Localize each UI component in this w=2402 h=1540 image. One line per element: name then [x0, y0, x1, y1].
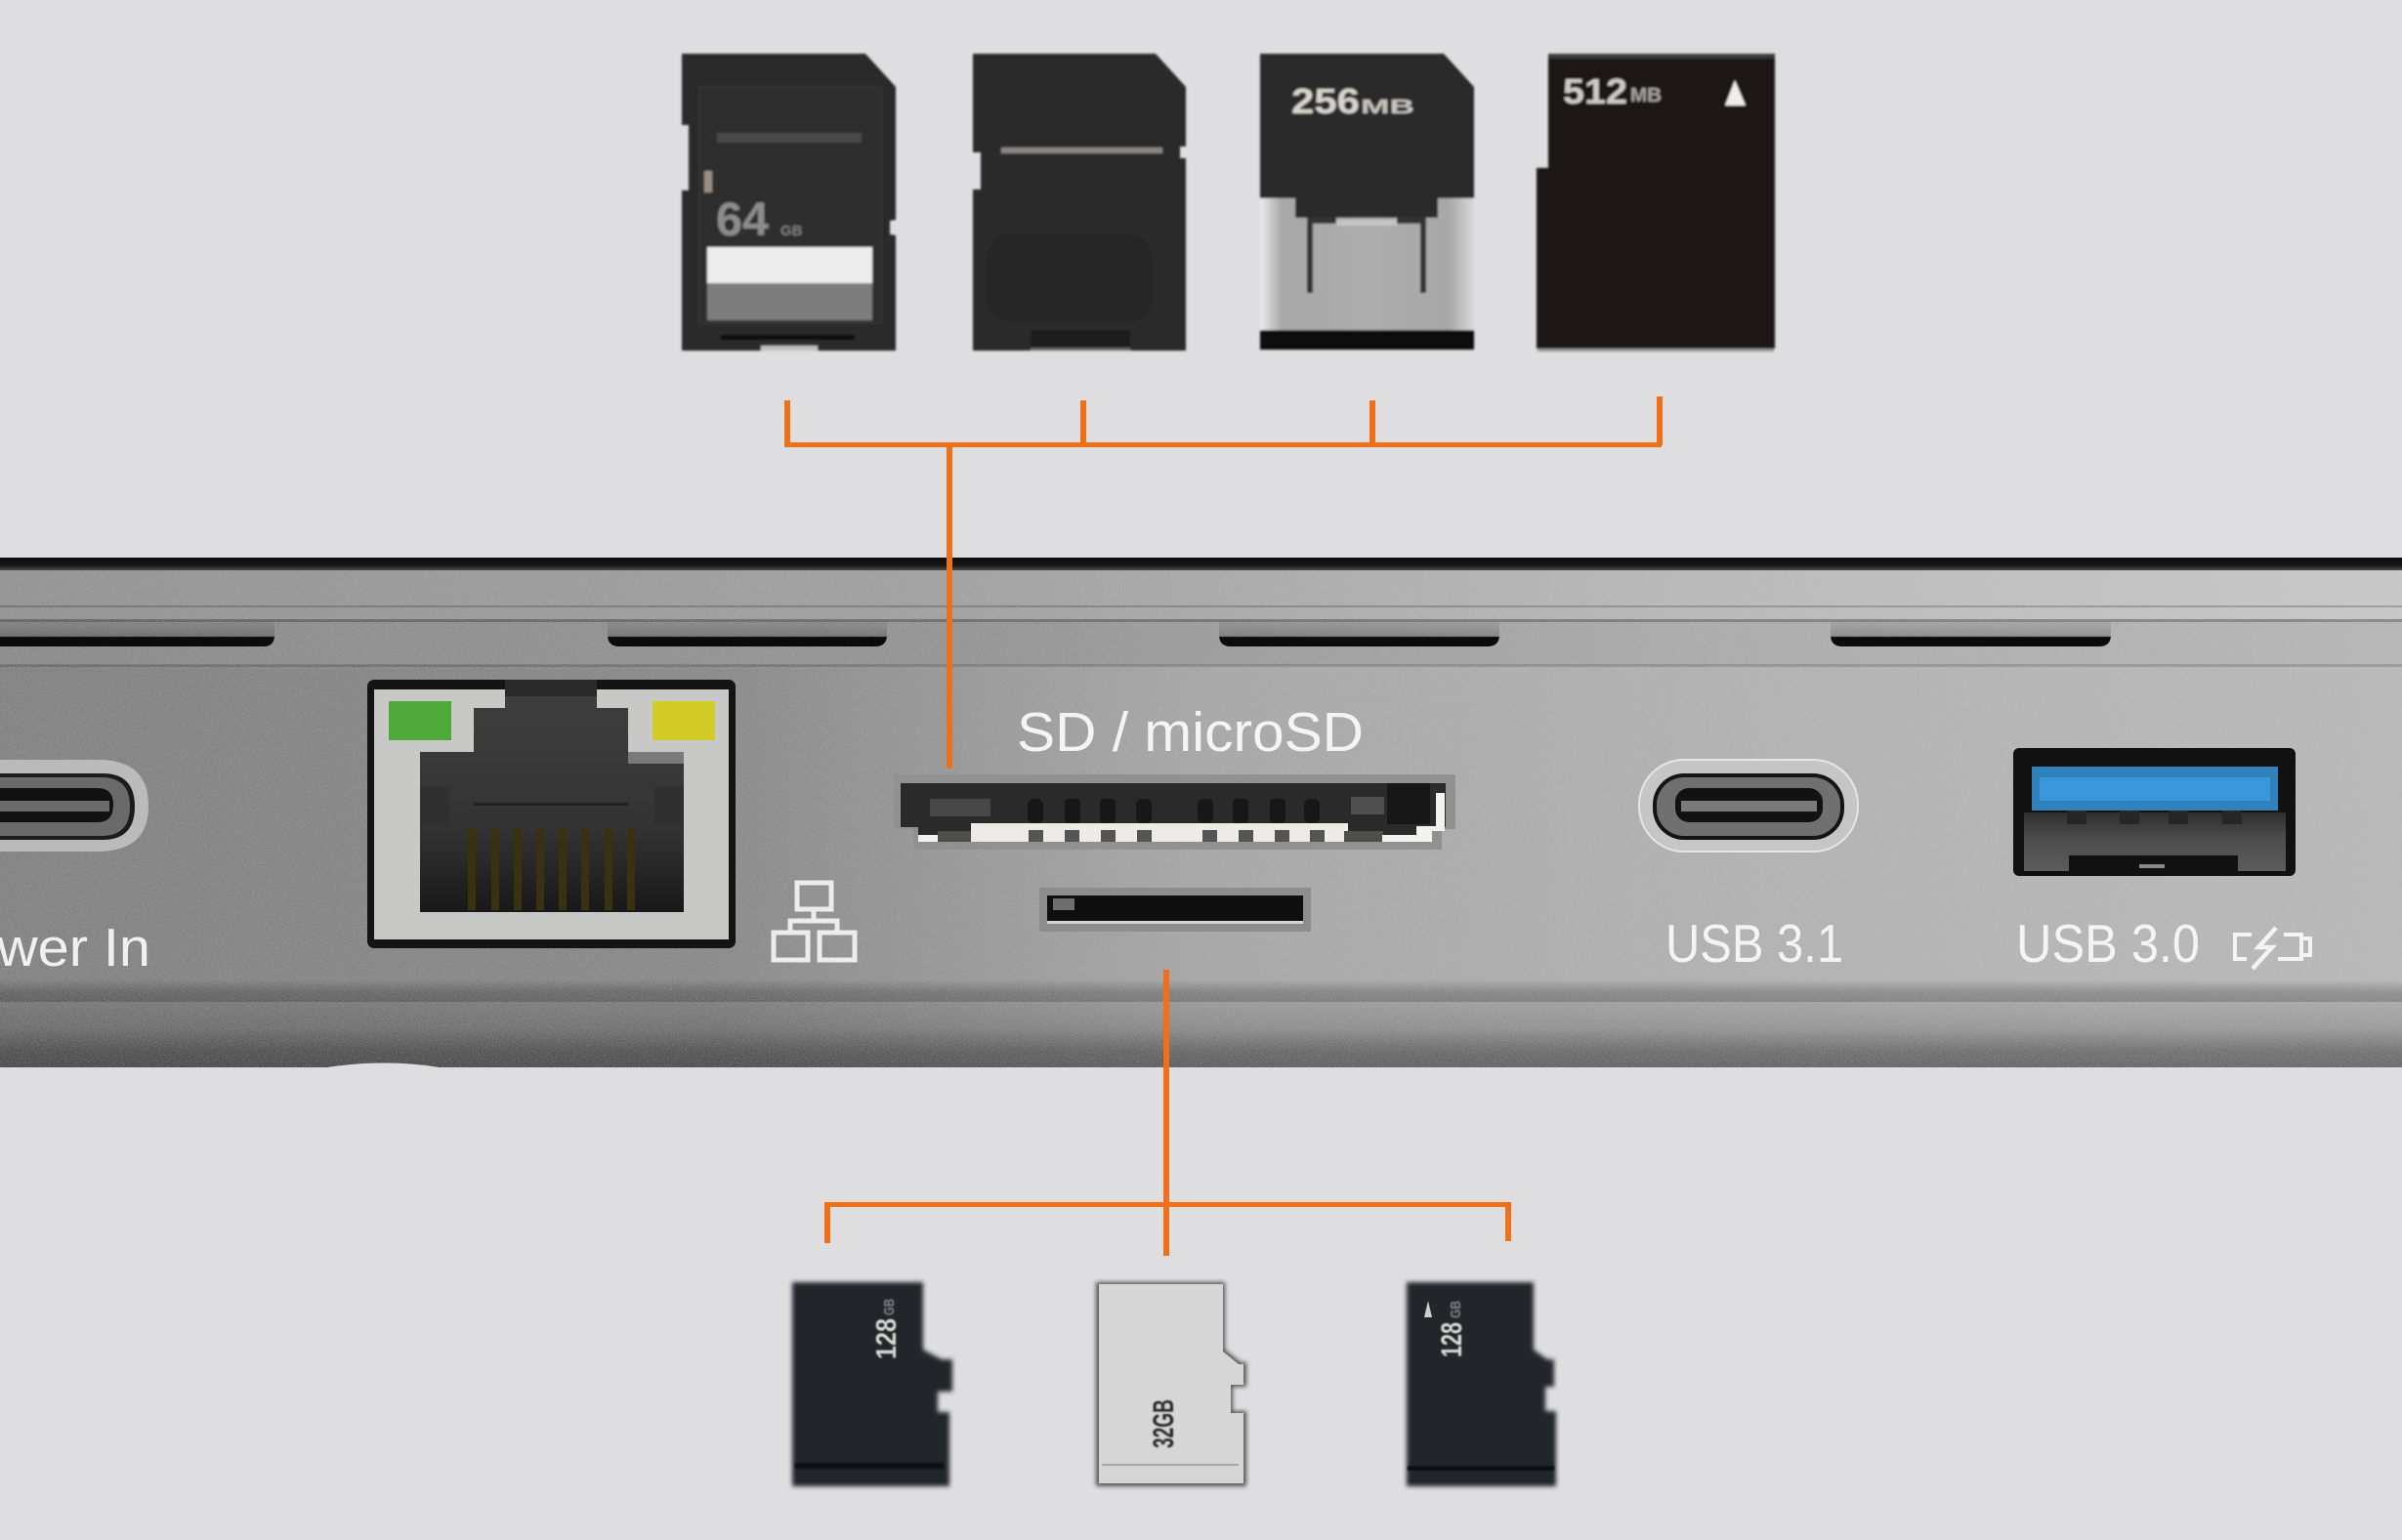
dock bottom band — [0, 1002, 2402, 1067]
microSD card: 32 GB white — [1096, 1282, 1246, 1486]
seam under lip — [0, 619, 2402, 622]
orange bracket from SD slot to SD cards — [784, 396, 1663, 447]
microSD card: 128 GB with triangle: GB — [1448, 1301, 1464, 1318]
orange line: SD slot up to bracket — [947, 444, 952, 769]
port: SD card slot — [894, 774, 1455, 850]
label: USB 3.1: USB 3.1 — [1665, 913, 1843, 974]
port: microSD slot — [1039, 888, 1311, 932]
top slots — [0, 622, 2111, 646]
slot 3 — [1219, 622, 1499, 646]
groove line — [0, 605, 2402, 607]
SD card: 512 MB black — [1537, 54, 1775, 352]
port: USB 3.1 USB-C — [1639, 760, 1858, 852]
label: SD / microSD: SD / microSD — [1017, 701, 1364, 764]
port: USB 3.0 USB-A — [2013, 748, 2296, 876]
row of full-size SD cards — [682, 54, 1775, 352]
icon: charging battery — [2235, 928, 2310, 969]
slot 1 — [0, 622, 274, 646]
LED: yellow — [653, 701, 715, 740]
SD card: back side — [973, 54, 1186, 351]
ledge — [0, 622, 2402, 665]
face top seam — [0, 664, 2402, 667]
label: Power In: wer In — [0, 917, 150, 978]
metal grain — [0, 570, 2402, 1067]
dock body — [0, 558, 2402, 1067]
microSD card: 128 GB — [792, 1282, 952, 1486]
slot 2 — [608, 622, 887, 646]
port: RJ45 Ethernet — [367, 680, 736, 948]
SD card: 64 GB — [682, 54, 896, 351]
microSD card: 128 GB: GB — [881, 1299, 898, 1315]
dark top edge — [0, 558, 2402, 570]
dock bottom shade — [0, 1002, 2402, 1067]
microSD card: 128 GB with triangle — [1407, 1282, 1556, 1486]
microSD card: 128 GB with triangle: 128 — [1436, 1322, 1468, 1357]
bottom curve notch — [327, 1062, 440, 1067]
SD card: 512 MB black: 512 — [1563, 71, 1627, 111]
label: USB 3.0: USB 3.0 — [2016, 913, 2200, 974]
RJ45 contact pins — [468, 828, 635, 910]
dock top lip — [0, 570, 2402, 622]
port: Power In USB-C — [0, 760, 148, 852]
SD card: 64 GB: 64 — [716, 194, 769, 246]
dock front face — [0, 665, 2402, 1002]
SD card: 256 MB with metal plate: 256 — [1291, 81, 1360, 121]
orange bracket from microSD slot to microSD cards — [824, 970, 1511, 1256]
SD card: 256 MB with metal plate — [1260, 54, 1474, 350]
LED: green — [389, 701, 451, 740]
row of microSD cards — [792, 1282, 1556, 1486]
SD card: 64 GB: GB — [780, 223, 803, 239]
icon: network — [774, 883, 855, 960]
microSD card: 128 GB: 128 — [871, 1318, 903, 1359]
lower face shading — [0, 979, 2402, 1002]
SD card: 512 MB black: MB — [1630, 85, 1662, 106]
SD card: 256 MB with metal plate: MB — [1361, 97, 1414, 118]
microSD card: 32 GB white: 32GB — [1148, 1399, 1180, 1448]
SD contacts — [1029, 830, 1325, 842]
slot 4 — [1831, 622, 2111, 646]
